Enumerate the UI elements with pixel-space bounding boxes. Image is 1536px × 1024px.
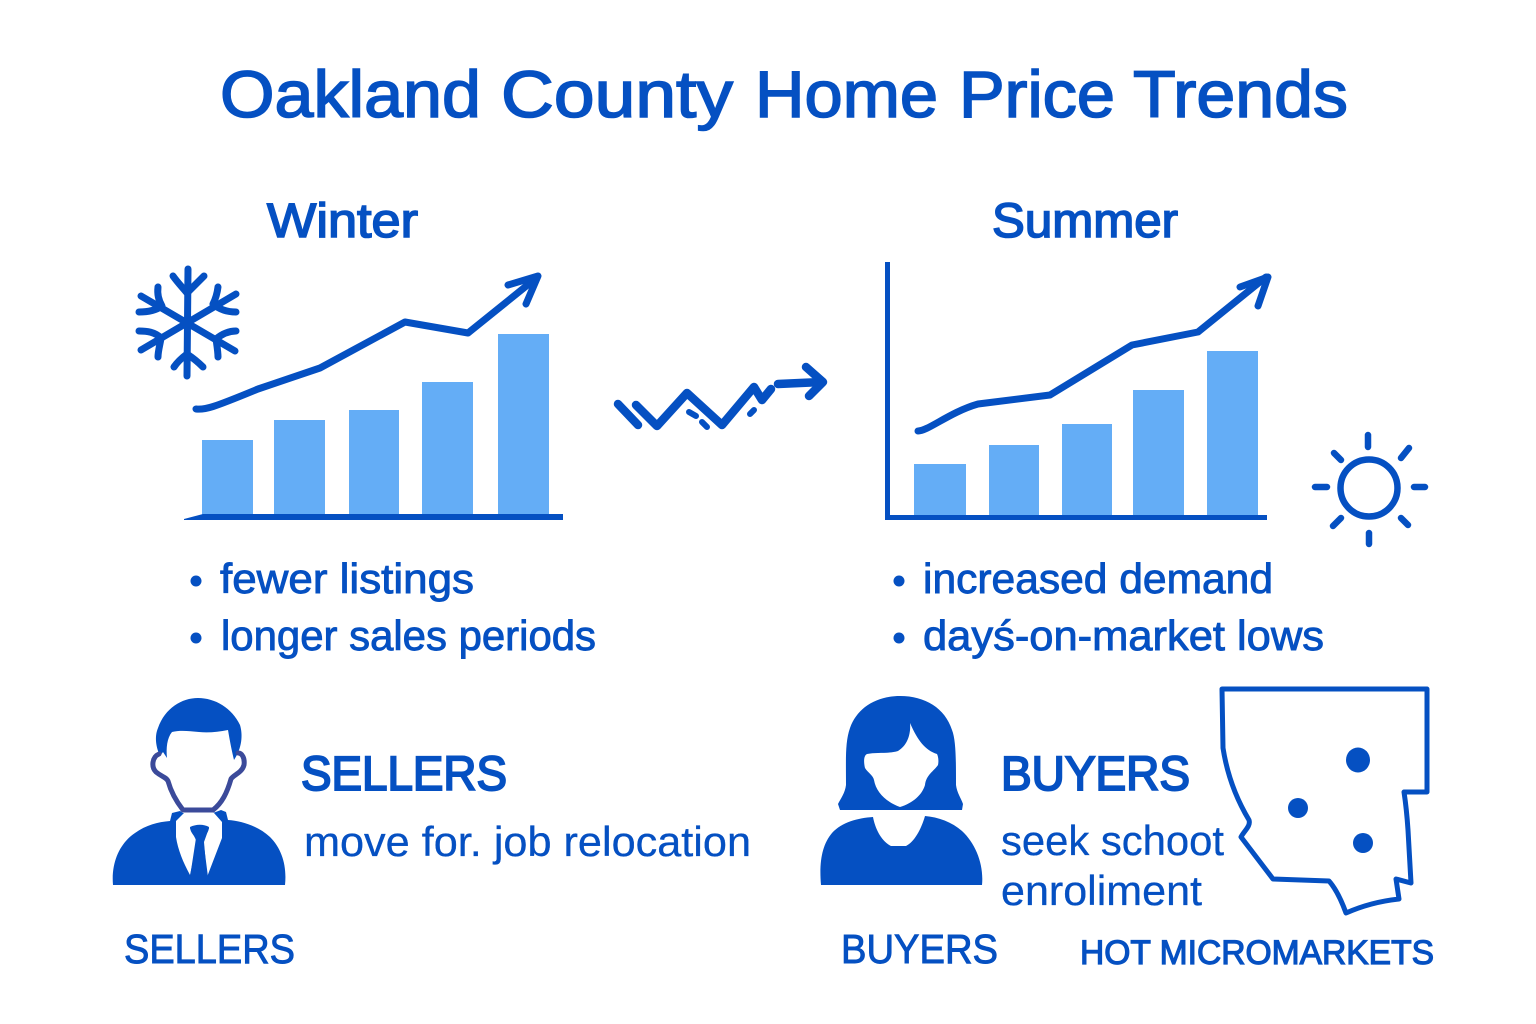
icon: sun [1315,435,1425,544]
text block: sellers description: move for. job relocation [304,818,751,865]
icon: seller man [113,698,285,885]
text block: buyers description: seek schoot [1001,817,1224,864]
text block: summer bullets [894,555,1324,659]
text block: winter bullets: longer sales periods [221,612,596,659]
label: buyers: BUYERS [841,926,998,972]
heading: winter: Winter [267,195,418,248]
text block: buyers description: enroliment [1001,867,1202,914]
heading: sellers: SELLERS [301,748,507,801]
title: Home [755,57,938,131]
text block: summer bullets: increased demand [923,555,1273,602]
icon: snowflake [139,269,236,376]
bar chart: summer [885,262,1268,520]
text block: winter bullets: fewer listings [220,555,474,602]
bar chart: winter [184,276,563,520]
icon: zigzag transition arrow [618,367,823,427]
map: hot micromarkets [1222,689,1427,913]
title: Trends [1133,57,1348,131]
trend arrow: winter [196,276,538,409]
label: sellers: SELLERS [124,926,295,972]
title [220,57,1348,131]
text block: buyers description [1001,817,1224,914]
trend arrow: summer [918,277,1268,431]
text block: winter bullets [190,555,596,659]
text block: summer bullets: dayś-on-market lows [923,612,1324,659]
label: hot micromarkets: HOT MICROMARKETS [1080,934,1434,972]
title: County [501,57,733,131]
title: Price [959,57,1115,131]
marker: micromarket dots [1288,748,1373,853]
icon: buyer woman [820,696,982,885]
heading: summer: Summer [992,195,1178,248]
heading: buyers: BUYERS [1001,748,1190,801]
title: Oakland [220,57,481,131]
